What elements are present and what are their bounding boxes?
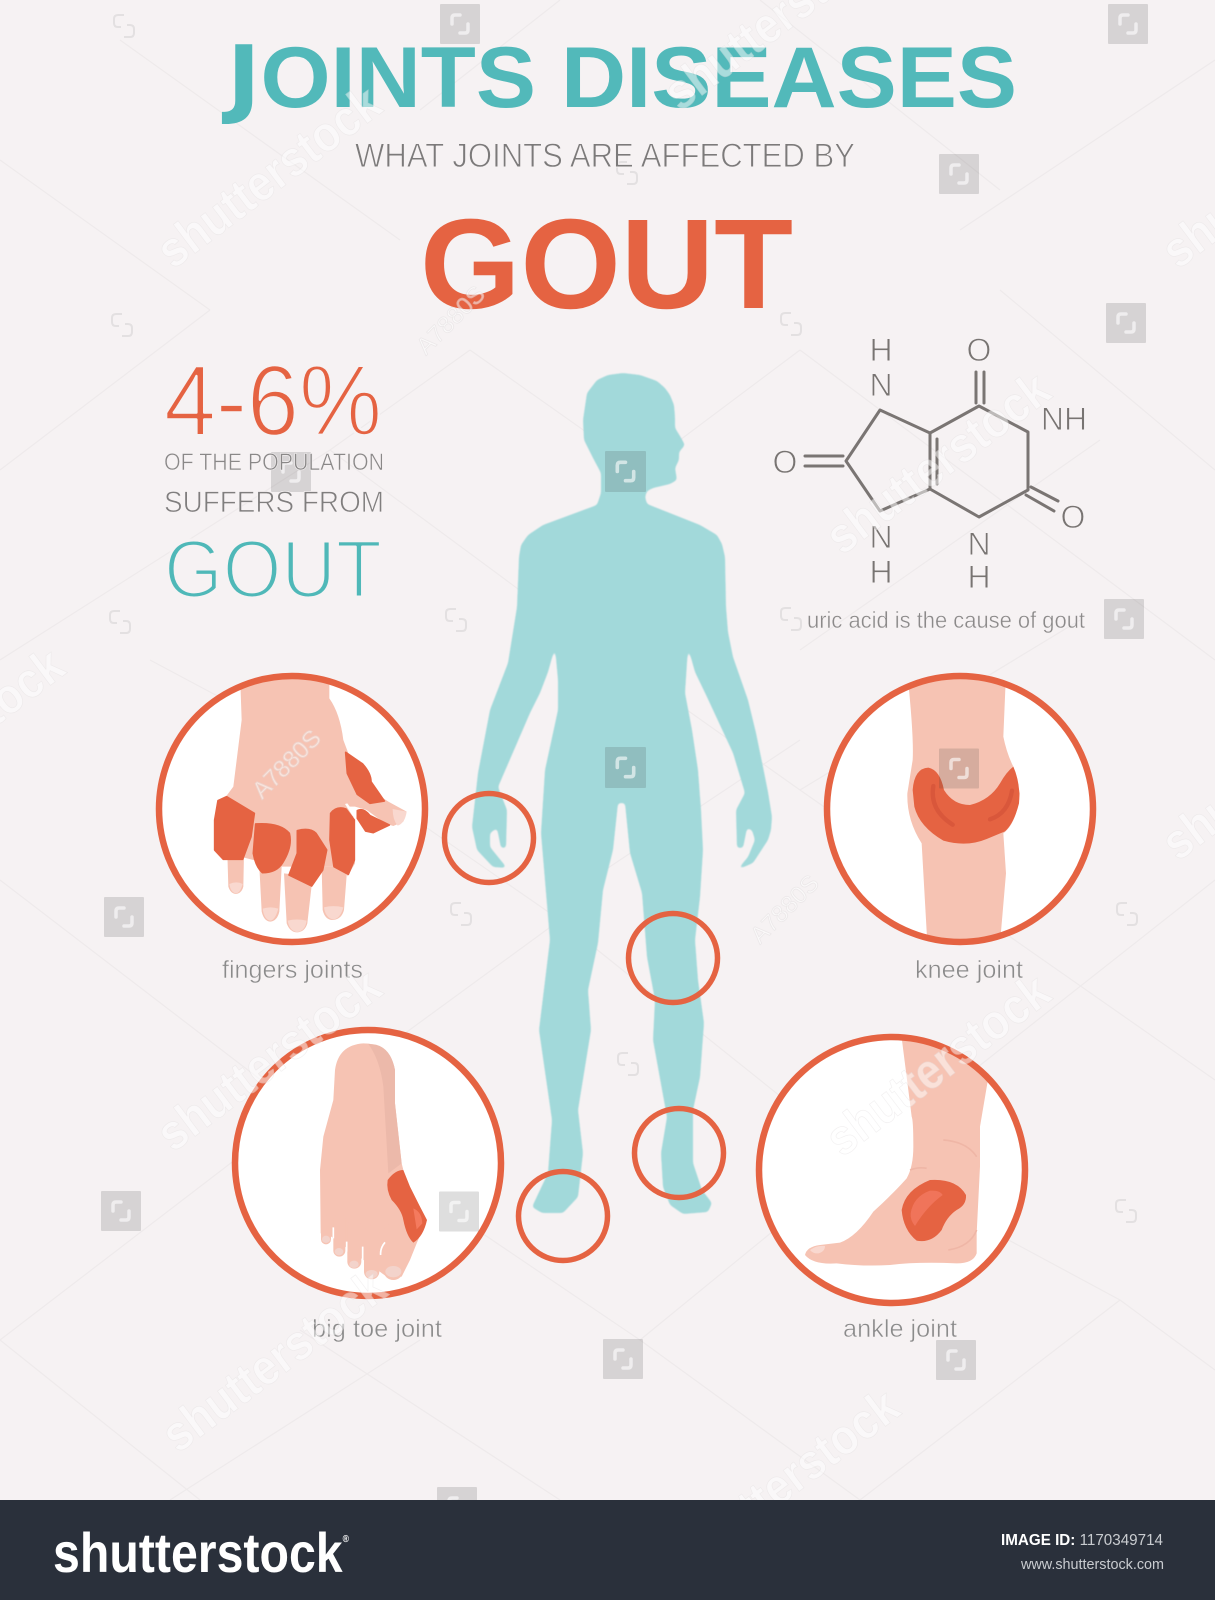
text: A7880S (745, 870, 825, 949)
swollen toe joint (387, 1170, 427, 1243)
chemical structure: uric acid: O (967, 332, 991, 368)
label: big toe joint: big toe joint (312, 1315, 442, 1343)
swollen joints (215, 752, 389, 886)
text: A7880S (247, 725, 327, 804)
footer logo: ® (343, 1534, 350, 1545)
text: shutterstock (146, 957, 391, 1162)
chemical structure: uric acid: O (773, 444, 797, 480)
toenails (322, 1236, 401, 1278)
ankle skin (805, 1040, 988, 1266)
label: fingers joints: fingers joints (222, 956, 363, 984)
text: shutterstock (815, 360, 1060, 565)
marker: ankle (634, 1108, 724, 1198)
marker: big toe (518, 1172, 608, 1260)
ankle creases (910, 1140, 977, 1250)
subtitle: WHAT JOINTS ARE AFFECTED BY (355, 137, 855, 175)
chemical structure: uric acid: N (967, 526, 991, 562)
foot side shade (368, 1044, 402, 1173)
chemical structure: uric acid: O (1061, 499, 1085, 535)
panel: knee joint (827, 673, 1093, 943)
chemical structure: uric acid: NH (1041, 401, 1087, 437)
statistic block (164, 345, 384, 615)
website: www.shutterstock.com (1020, 1556, 1164, 1573)
hand skin (214, 673, 407, 877)
text: A7880S (411, 281, 491, 360)
label: ankle joint: ankle joint (843, 1315, 957, 1343)
text: shutterstock (815, 962, 1060, 1167)
text: of the population: OF THE POPULATION (164, 449, 384, 476)
toe gaps (332, 1227, 386, 1260)
text: gout: GOUT (164, 524, 382, 615)
statistic: 4-6%: 4-6% (164, 345, 382, 457)
chemical structure: uric acid: H (869, 332, 893, 368)
text: shutterstock (146, 74, 391, 279)
footer logo: shutterstock (53, 1521, 389, 1584)
panel: fingers joints (159, 673, 425, 942)
human body silhouette (472, 373, 772, 1214)
text: shutterstock (664, 1377, 909, 1582)
marker: knee (628, 914, 718, 1002)
chemical structure: uric acid: H (967, 559, 991, 595)
knee skin (907, 673, 1020, 943)
chemical structure: uric acid: N (869, 519, 893, 555)
swollen ankle (902, 1180, 966, 1241)
foot skin (320, 1043, 427, 1277)
toes (326, 1220, 393, 1272)
caption: uric acid: uric acid is the cause of gout (807, 607, 1086, 633)
swollen knee (913, 767, 1019, 844)
footer bar (0, 1500, 1215, 1600)
fingers (227, 853, 347, 932)
panel: big toe joint (235, 1030, 501, 1296)
heading: gout: GOUT (420, 193, 793, 336)
title: JOINTS DISEASES (222, 28, 1017, 128)
marker: wrist (444, 794, 534, 882)
image id: IMAGE ID: 1170349714 (1001, 1532, 1163, 1549)
text: suffers from: SUFFERS FROM (164, 486, 384, 519)
text: shutterstock (151, 1258, 396, 1463)
nails (229, 809, 407, 932)
chemical structure: uric acid: N (869, 367, 893, 403)
label: knee joint: knee joint (915, 956, 1023, 984)
chemical structure: uric acid: H (869, 554, 893, 590)
chemical structure: uric acid (773, 332, 1087, 595)
panel: ankle joint (759, 1030, 1025, 1303)
